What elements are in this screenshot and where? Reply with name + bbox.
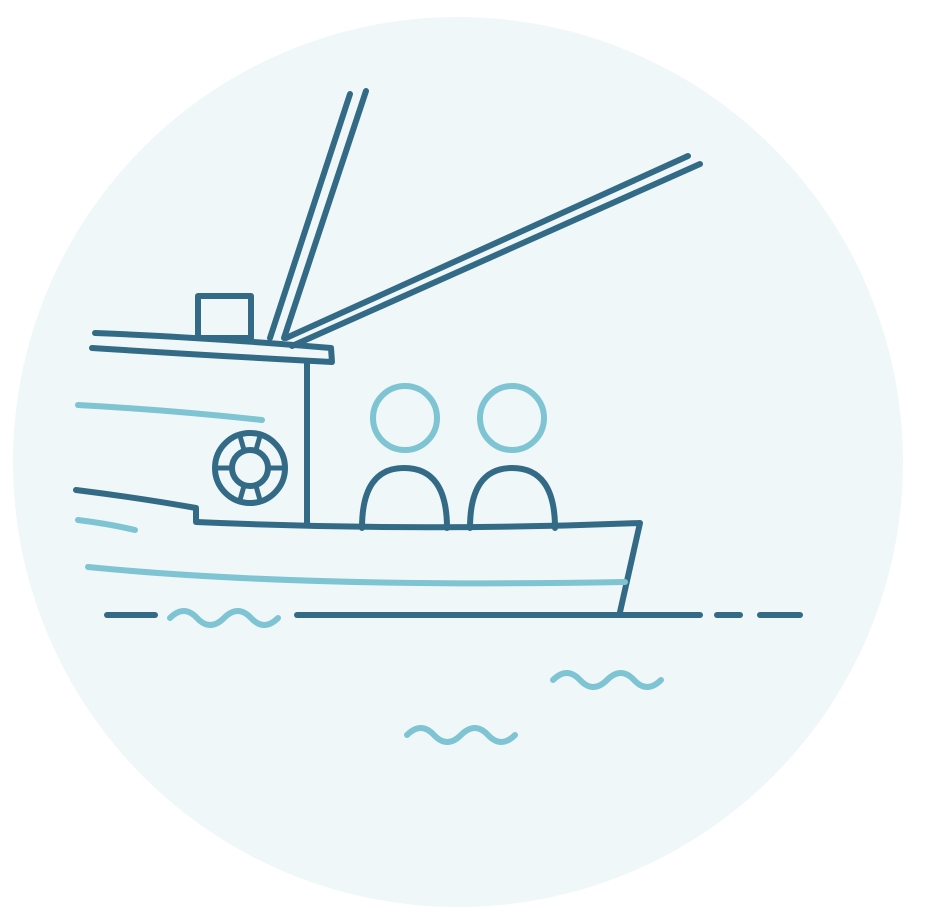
cabin roof bbox=[92, 333, 332, 362]
people bodies bbox=[362, 468, 555, 528]
hull stripes bbox=[78, 520, 135, 530]
waterline bbox=[107, 612, 800, 618]
life ring bbox=[215, 433, 285, 503]
boat bbox=[76, 91, 800, 615]
deck and hull bbox=[76, 490, 640, 612]
light accents bbox=[78, 386, 661, 742]
heads bbox=[373, 386, 544, 450]
boom bbox=[286, 156, 700, 346]
mast bbox=[270, 91, 366, 338]
roof box bbox=[198, 296, 251, 338]
cabin stripe bbox=[78, 405, 262, 420]
waves bbox=[170, 611, 278, 625]
cabin wall bbox=[304, 363, 310, 524]
